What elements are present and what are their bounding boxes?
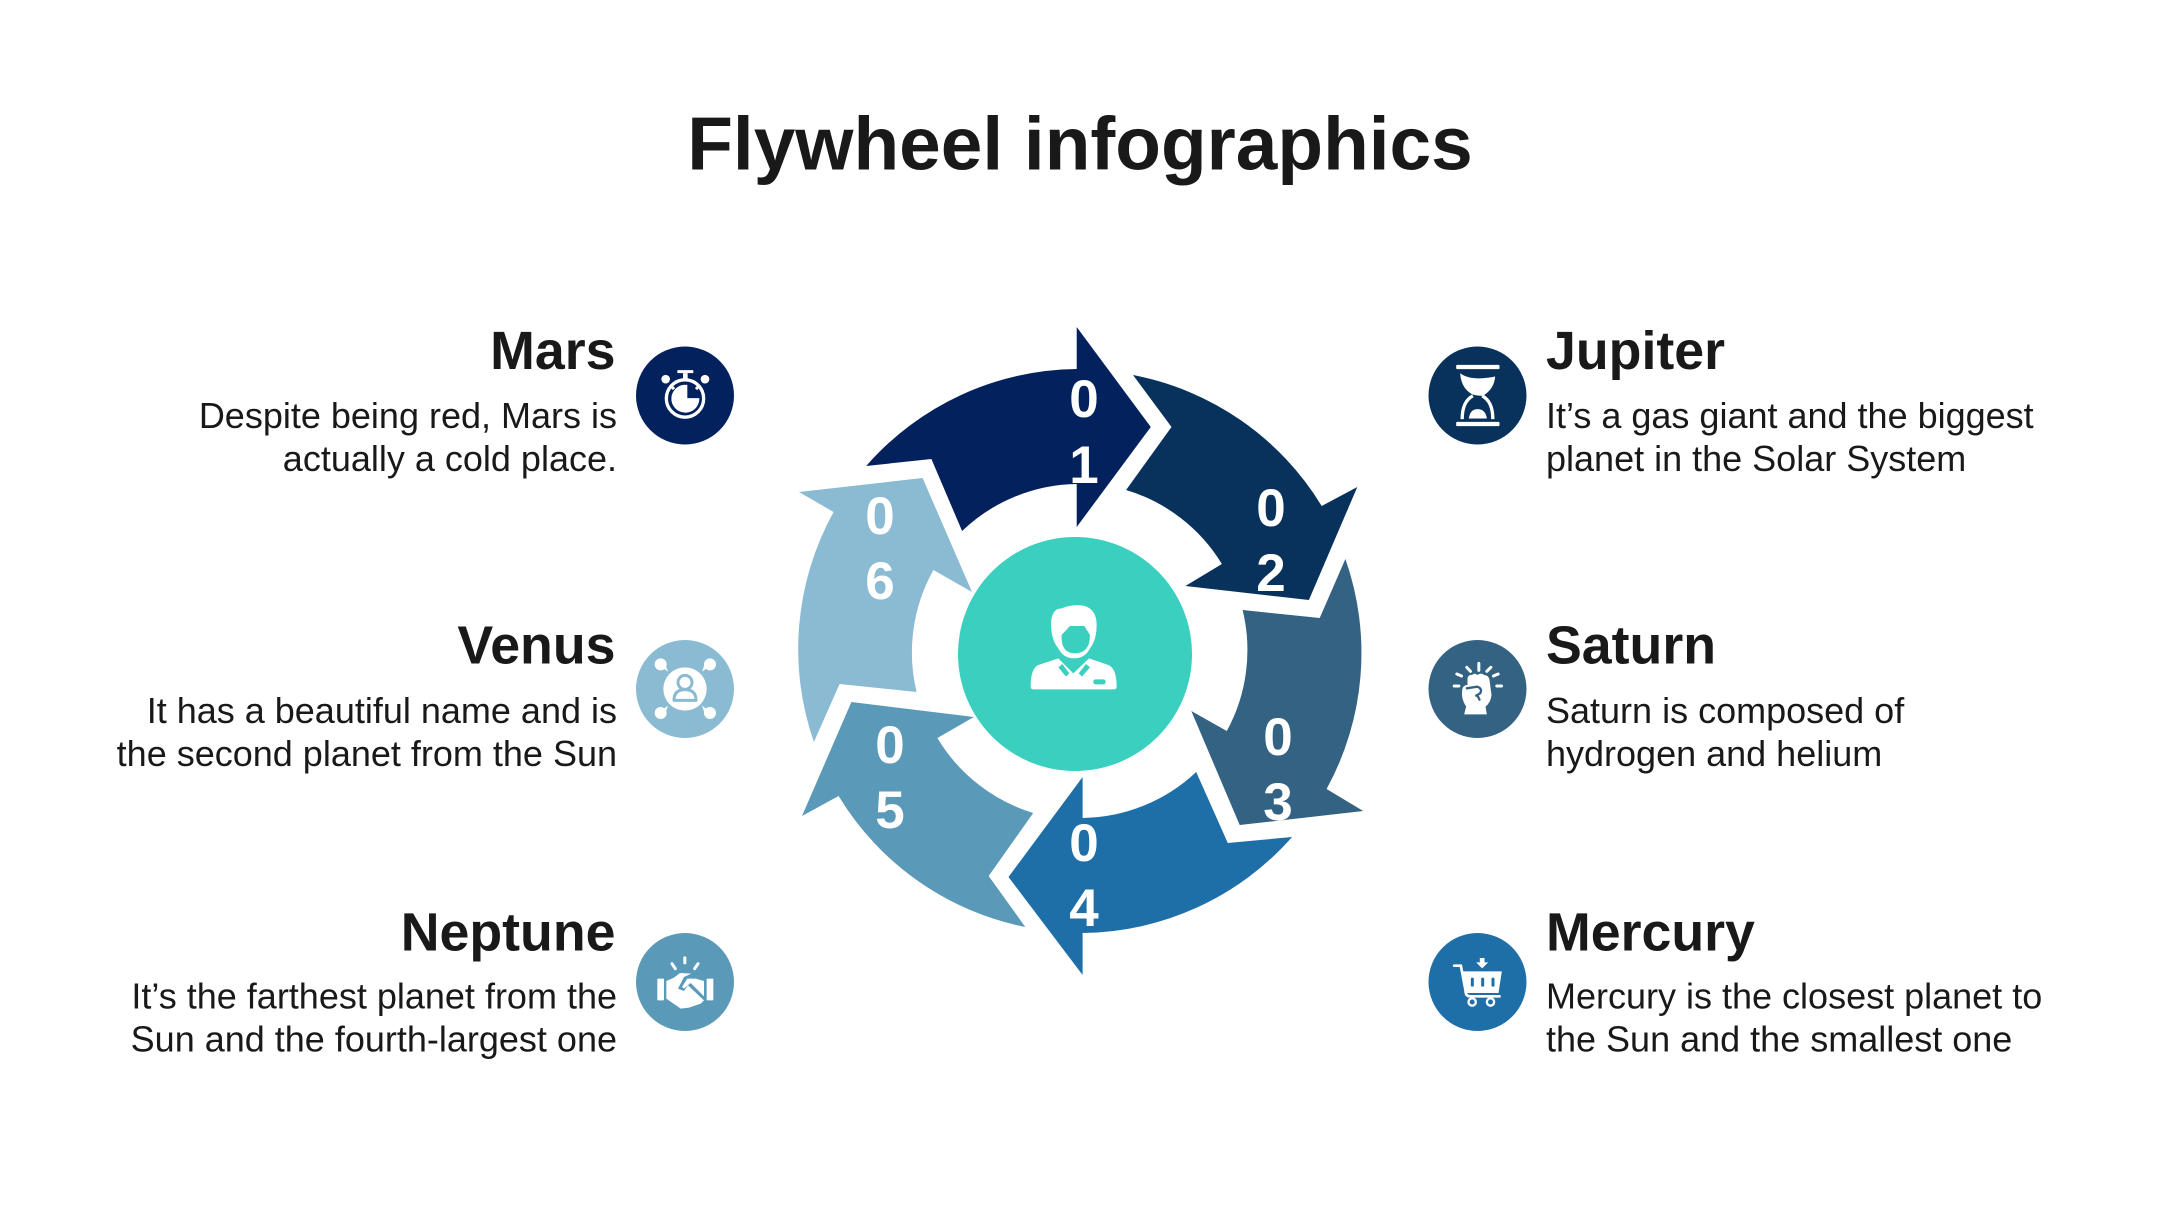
icon: handshake [636,933,734,1031]
heading: Mercury: Mercury [1546,902,1755,962]
heading: Venus: Venus [457,616,616,676]
arrow 04: 0 [1069,814,1099,873]
icon: fist [1429,640,1526,738]
heading: Saturn: Saturn [1546,616,1716,676]
arrow 05: 5 [875,781,905,840]
panel: Neptune [131,902,734,1060]
arrow 02 [1126,375,1357,603]
panel: Jupiter [1429,321,2034,479]
arrow 03: 3 [1263,773,1293,832]
arrow 01: 1 [1069,436,1099,495]
flywheel diagram [798,327,1363,975]
panel: Venus [117,616,734,774]
arrow 01 [866,327,1151,531]
arrow 06 [798,478,972,742]
text: Venus description: the second planet from the Sun [117,733,617,774]
panel: Mercury [1429,902,2042,1060]
text: Mars description: actually a cold place. [283,438,617,479]
heading: Jupiter: Jupiter [1546,321,1725,381]
icon: shopping cart [1429,933,1526,1031]
arrow 02: 2 [1256,544,1286,603]
center hub [958,537,1192,771]
text: Saturn description: Saturn is composed of [1546,690,1905,731]
icon: hourglass [1429,347,1526,444]
icon: person network [636,640,734,738]
arrow 04: 4 [1069,879,1099,938]
icon: stopwatch [636,347,734,444]
panel: Saturn [1429,616,1905,774]
title: Flywheel infographics [687,102,1473,186]
text: Jupiter description: It’s a gas giant and the biggest [1546,395,2034,436]
text: Mercury description: Mercury is the closest planet to [1546,976,2042,1016]
arrow 06: 6 [865,552,895,611]
text: Neptune description: It’s the farthest planet from the [131,976,617,1016]
text: Jupiter description: planet in the Solar System [1546,438,1966,479]
text: Saturn description: hydrogen and helium [1546,733,1882,774]
text: Mercury description: the Sun and the smallest one [1546,1018,2012,1060]
heading: Mars: Mars [490,321,616,381]
arrow 05 [802,702,1033,927]
arrow 04 [1008,772,1292,975]
arrow 03 [1191,559,1363,832]
arrow 06: 0 [865,487,895,546]
arrow 03: 0 [1263,708,1293,767]
text: Venus description: It has a beautiful name and is [147,690,617,731]
text: Mars description: Despite being red, Mars is [199,395,617,436]
panel: Mars [199,321,734,479]
arrow 01: 0 [1069,370,1099,429]
arrow 02: 0 [1256,479,1286,538]
icon: person [1031,605,1117,689]
text: Neptune description: Sun and the fourth-largest one [131,1018,617,1060]
arrow 05: 0 [875,716,905,775]
heading: Neptune: Neptune [401,902,616,962]
